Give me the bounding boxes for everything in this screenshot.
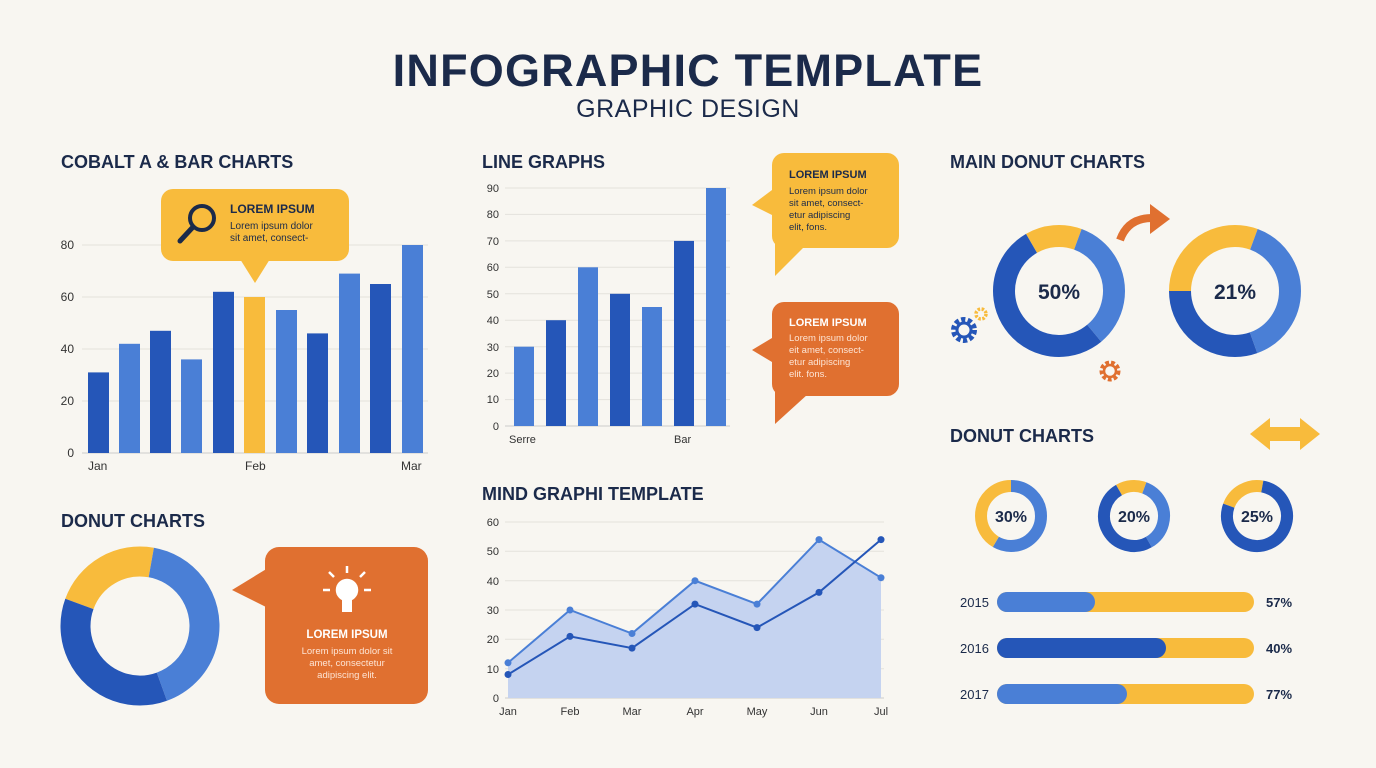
title (393, 45, 983, 123)
callout: yellow: sit amet, consect- (789, 198, 863, 209)
panel: cobalt bar charts: 20 (61, 394, 74, 408)
callout: yellow search: LOREM IPSUM (230, 202, 315, 216)
panel: mind graph template: 60 (487, 517, 499, 529)
callout: yellow: elit, fons. (789, 222, 827, 233)
progress bars: 40% (1266, 641, 1292, 656)
icon: gears (954, 309, 1118, 379)
panel: line graphs: 40 (487, 315, 499, 327)
panel: mind graph template: 30 (487, 605, 499, 617)
panel: line graphs: 50 (487, 289, 499, 301)
heading: donut charts right: DONUT CHARTS (950, 426, 1094, 446)
heading: cobalt: COBALT A & BAR CHARTS (61, 152, 293, 172)
panel: line graphs: 90 (487, 183, 499, 195)
title: INFOGRAPHIC TEMPLATE (393, 45, 983, 96)
panel: mind graph template: Jun (810, 706, 828, 718)
panel: line graphs: 80 (487, 209, 499, 221)
panel: donut charts right (950, 418, 1320, 704)
icon: double arrow (1250, 418, 1320, 450)
callout: orange: etur adipiscing (789, 357, 850, 368)
callout: yellow: etur adipiscing (789, 210, 850, 221)
heading: mind graph: MIND GRAPHI TEMPLATE (482, 484, 704, 504)
donut: 20% (1093, 475, 1175, 557)
callout: orange: Lorem ipsum dolor (789, 333, 868, 344)
callout: yellow search: sit amet, consect- (230, 233, 308, 244)
callout: orange lightbulb: LOREM IPSUM (306, 629, 388, 641)
panel: line graphs: 20 (487, 368, 499, 380)
callout: orange lightbulb: amet, consectetur (309, 658, 385, 669)
donut: 25% (1219, 478, 1295, 554)
panel: mind graph template: Apr (686, 706, 704, 718)
donut: 21% (1180, 236, 1290, 346)
panel: line graphs: 60 (487, 262, 499, 274)
panel: line graphs: 70 (487, 236, 499, 248)
panel: line graphs: 10 (487, 394, 499, 406)
icon: magnifier (180, 206, 214, 241)
callout: orange lightbulb: Lorem ipsum dolor sit (302, 646, 393, 657)
panel: mind graph template: Mar (623, 706, 642, 718)
panel: cobalt bar charts (61, 152, 428, 473)
callout: yellow search (161, 189, 349, 283)
callout: orange: eit amet, consect- (789, 345, 864, 356)
panel: cobalt bar charts: Feb (245, 459, 266, 473)
progress bars: 2016 (960, 641, 989, 656)
panel: line graphs: 0 (493, 421, 499, 433)
panel: mind graph template: May (747, 706, 768, 718)
panel: cobalt bar charts: Mar (401, 459, 422, 473)
donut: 20%: 20% (1118, 509, 1150, 526)
progress bars: 57% (1266, 595, 1292, 610)
panel: mind graph template: 0 (493, 693, 499, 705)
progress bars: 2015 (960, 595, 989, 610)
heading: main donut: MAIN DONUT CHARTS (950, 152, 1145, 172)
bar chart: line graphs (514, 188, 726, 426)
callout: yellow: LOREM IPSUM (789, 169, 867, 181)
heading: donut charts left: DONUT CHARTS (61, 511, 205, 531)
donut: 21%: 21% (1214, 281, 1256, 304)
panel: mind graph template (482, 484, 888, 718)
donut: 25%: 25% (1241, 509, 1273, 526)
heading: line graphs: LINE GRAPHS (482, 152, 605, 172)
progress bars: 77% (1266, 687, 1292, 702)
panel: cobalt bar charts: 80 (61, 238, 74, 252)
panel: line graphs: Bar (674, 434, 691, 446)
bar chart (88, 245, 423, 453)
callout: yellow search: Lorem ipsum dolor (230, 221, 313, 232)
callout: orange: elit. fons. (789, 369, 827, 380)
donut: large (57, 543, 223, 709)
panel: mind graph template: 20 (487, 634, 499, 646)
panel: line graphs: Serre (509, 434, 536, 446)
panel: line graphs: 30 (487, 342, 499, 354)
progress bars: 2017 (960, 687, 989, 702)
panel: mind graph template: Jan (499, 706, 517, 718)
donut: 50% (984, 216, 1134, 366)
icon: lightbulb (323, 566, 371, 612)
progress bars (960, 592, 1292, 704)
panel: mind graph template: Feb (561, 706, 579, 718)
title: GRAPHIC DESIGN (576, 95, 800, 123)
line chart (504, 536, 884, 698)
panel: cobalt bar charts: 40 (61, 342, 74, 356)
panel: donut charts left (57, 511, 428, 709)
panel: mind graph template: Jul (874, 706, 888, 718)
callout: yellow (752, 153, 899, 276)
panel: mind graph template: 40 (487, 576, 499, 588)
panel: mind graph template: 10 (487, 664, 499, 676)
callout: orange lightbulb (232, 547, 428, 704)
donut: 30%: 30% (995, 509, 1027, 526)
donut: 50%: 50% (1038, 281, 1080, 304)
panel: mind graph template: 50 (487, 546, 499, 558)
callout: orange: LOREM IPSUM (789, 317, 867, 329)
donut: 30% (981, 486, 1041, 546)
callout: yellow: Lorem ipsum dolor (789, 186, 868, 197)
arrow: curved orange (1120, 204, 1170, 240)
panel: main donut charts (950, 152, 1290, 379)
panel: line graphs (482, 152, 899, 446)
panel: cobalt bar charts: 0 (67, 446, 74, 460)
callout: orange lightbulb: adipiscing elit. (317, 670, 377, 681)
panel: cobalt bar charts: 60 (61, 290, 74, 304)
panel: cobalt bar charts: Jan (88, 459, 107, 473)
callout: orange (752, 302, 899, 424)
